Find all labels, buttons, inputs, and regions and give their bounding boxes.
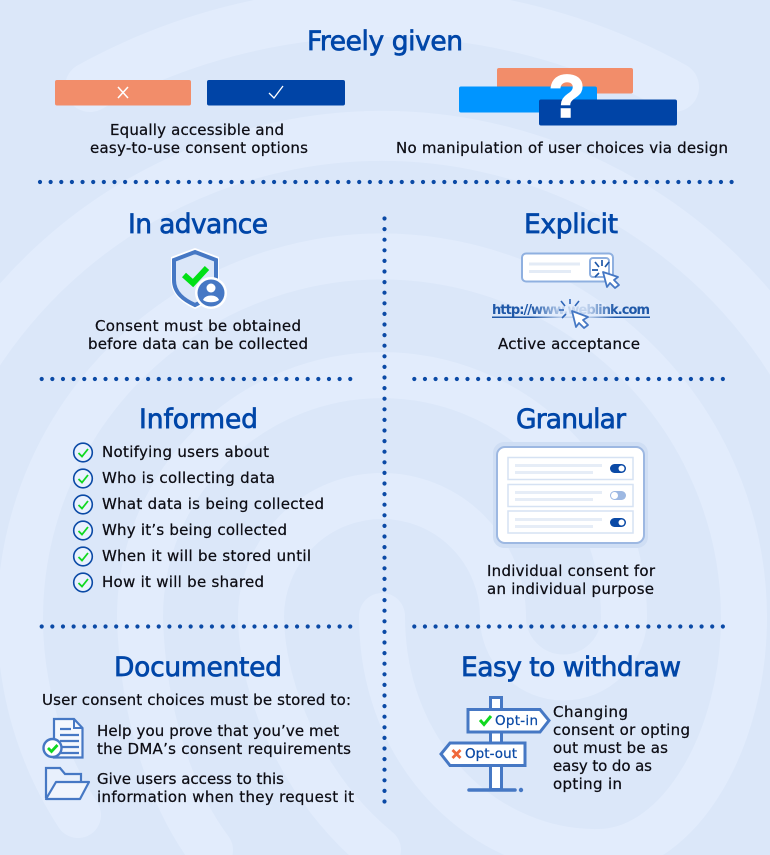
icon: overlapping buttons with question mark: ? <box>549 63 585 130</box>
text: changing consent: Changing <box>553 703 628 721</box>
icon: document with check <box>44 719 82 758</box>
heading: Easy to withdraw: Easy to withdraw <box>461 652 681 683</box>
reject button <box>55 80 191 106</box>
panel: explicit <box>492 209 650 353</box>
text: changing consent: opting in <box>553 775 622 793</box>
icon: overlapping buttons with question mark <box>459 63 677 130</box>
text: help you prove: the DMA’s consent requirements <box>97 740 351 758</box>
panel: granular <box>487 404 656 598</box>
text: individual consent: Individual consent for <box>487 562 656 580</box>
text: no manipulation: No manipulation of user choices via design <box>396 139 728 157</box>
icon: folder <box>46 768 89 799</box>
item: who is collecting: Who is collecting data <box>102 469 275 487</box>
text: give users access: information when they request it <box>97 788 354 806</box>
heading: Explicit: Explicit <box>524 209 618 240</box>
text: consent must be obtained: before data can be collected <box>88 335 308 353</box>
panel: documented <box>42 652 354 806</box>
heading: Informed: Informed <box>139 404 258 435</box>
text: give users access: Give users access to this <box>97 770 284 788</box>
text: stored to: User consent choices must be stored to: <box>42 691 351 709</box>
panel: freely given <box>55 26 728 157</box>
icon: click on button <box>522 254 619 288</box>
heading: Granular: Granular <box>516 404 626 435</box>
heading: Documented: Documented <box>114 652 282 683</box>
text: individual consent: an individual purpose <box>487 580 654 598</box>
icon: consent toggles <box>493 442 648 548</box>
accept button <box>207 80 345 106</box>
icon: signpost <box>441 698 549 792</box>
item: notifying users: Notifying users about <box>102 443 269 461</box>
icon: web link click: http://www.weblink.com <box>492 303 650 318</box>
panel: informed <box>74 404 324 592</box>
text: changing consent <box>553 703 690 793</box>
text: changing consent: consent or opting <box>553 721 690 739</box>
text: individual consent <box>487 562 656 598</box>
text: equally accessible: easy-to-use consent options <box>90 139 308 157</box>
item: how shared: How it will be shared <box>102 573 264 591</box>
sign: opt-out: Opt-out <box>465 746 517 762</box>
panel: in advance <box>88 209 308 353</box>
icon: web link click <box>492 299 650 328</box>
text: help you prove <box>97 722 351 758</box>
text: changing consent: easy to do as <box>553 757 652 775</box>
text: give users access <box>97 770 354 806</box>
text: consent must be obtained: Consent must be obtained <box>95 317 301 335</box>
list: informed items <box>74 443 324 592</box>
panel: easy to withdraw <box>441 652 690 793</box>
heading: Freely given: Freely given <box>307 26 463 57</box>
text: equally accessible: Equally accessible and <box>110 121 284 139</box>
heading: In advance: In advance <box>128 209 268 240</box>
text: equally accessible <box>90 121 308 157</box>
item: why collected: Why it’s being collected <box>102 521 287 539</box>
item: when stored: When it will be stored until <box>102 547 311 565</box>
text: help you prove: Help you prove that you’ve met <box>97 722 339 740</box>
text: active acceptance: Active acceptance <box>498 335 640 353</box>
text: consent must be obtained <box>88 317 308 353</box>
text: changing consent: out must be as <box>553 739 668 757</box>
sign: opt-in: Opt-in <box>495 713 538 729</box>
icon: shield with check and user <box>171 248 227 309</box>
item: what data: What data is being collected <box>102 495 324 513</box>
